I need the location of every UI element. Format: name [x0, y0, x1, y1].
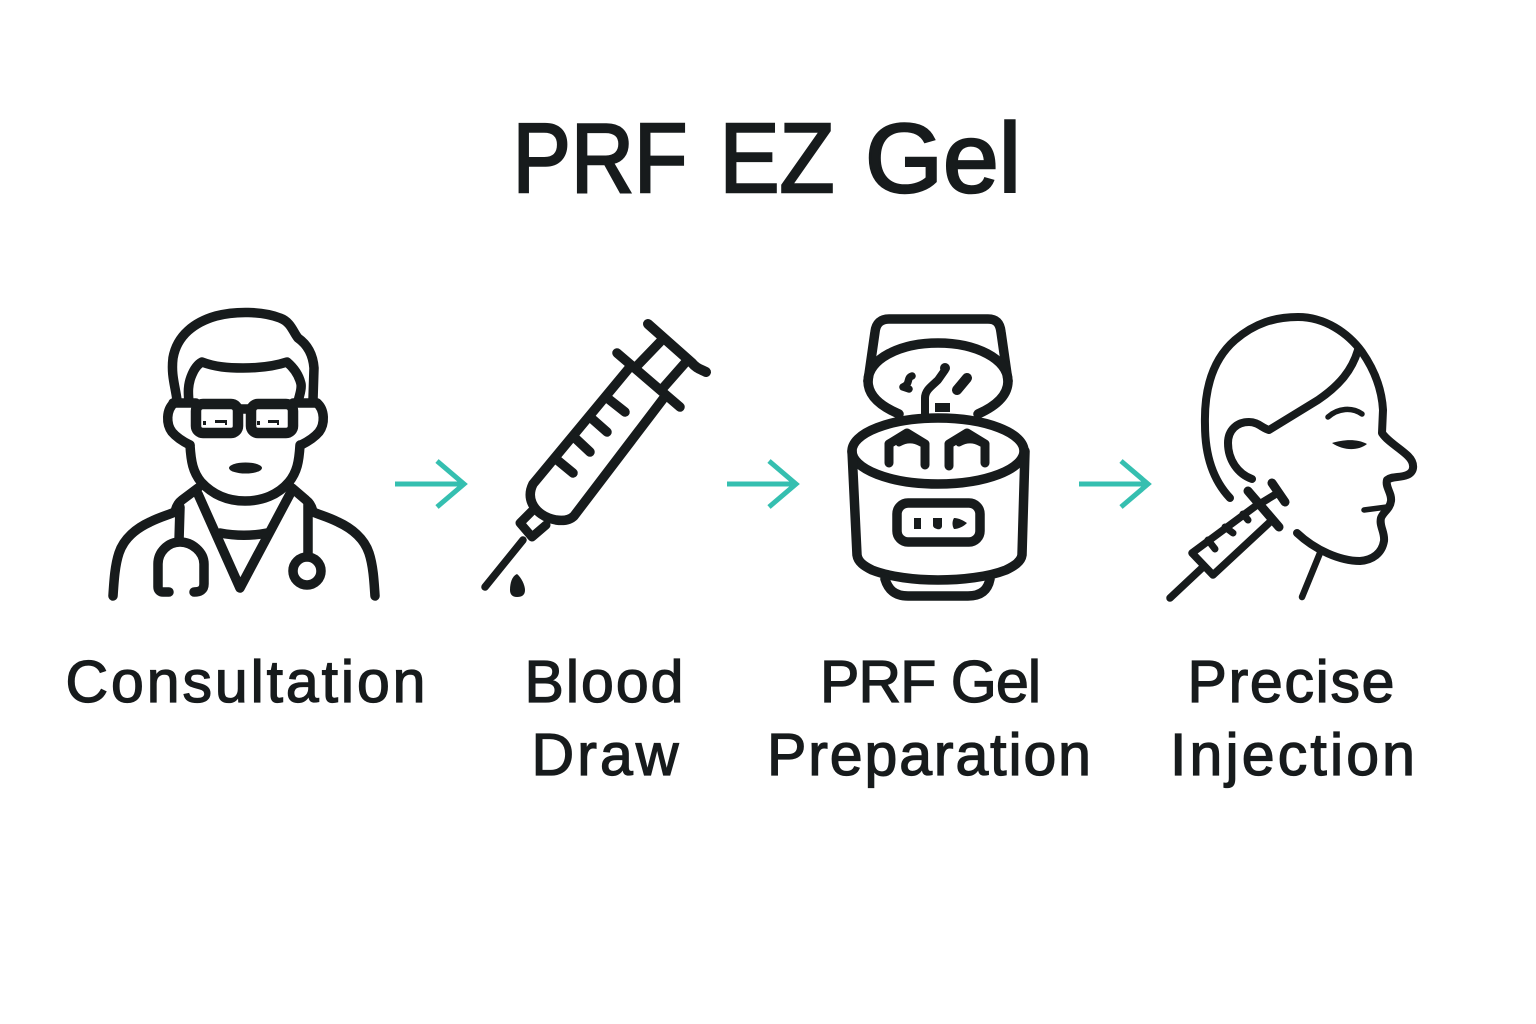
label: Blood Draw: Draw — [532, 722, 679, 788]
label: Blood Draw — [524, 649, 684, 788]
step 3: PRF gel preparation — [767, 319, 1091, 788]
icon: face profile with syringe — [1170, 317, 1413, 598]
step 2: blood draw — [485, 324, 706, 788]
icon: centrifuge — [852, 319, 1025, 596]
arrow 3 — [1079, 461, 1148, 507]
icon: syringe with blood drop — [485, 324, 706, 597]
title: EZ — [720, 103, 834, 213]
title: PRF — [512, 103, 688, 213]
label: Precise Injection — [1170, 649, 1415, 788]
label: Consultation: Consultation — [66, 649, 426, 715]
icon: doctor with stethoscope — [113, 312, 375, 596]
label: Precise Injection: Injection — [1170, 722, 1415, 788]
arrow 1 — [395, 461, 464, 507]
label: PRF Gel Preparation: Preparation — [767, 722, 1091, 788]
title: Gel — [865, 103, 1021, 213]
label: Precise Injection: Precise — [1188, 649, 1394, 715]
label: PRF Gel Preparation — [767, 649, 1091, 788]
arrow 2 — [727, 461, 796, 507]
step 1: consultation — [66, 312, 426, 715]
step 4: precise injection — [1170, 317, 1415, 788]
label: Blood Draw: Blood — [524, 649, 684, 715]
label: PRF Gel Preparation: PRF Gel — [820, 649, 1041, 715]
title — [512, 103, 1021, 213]
